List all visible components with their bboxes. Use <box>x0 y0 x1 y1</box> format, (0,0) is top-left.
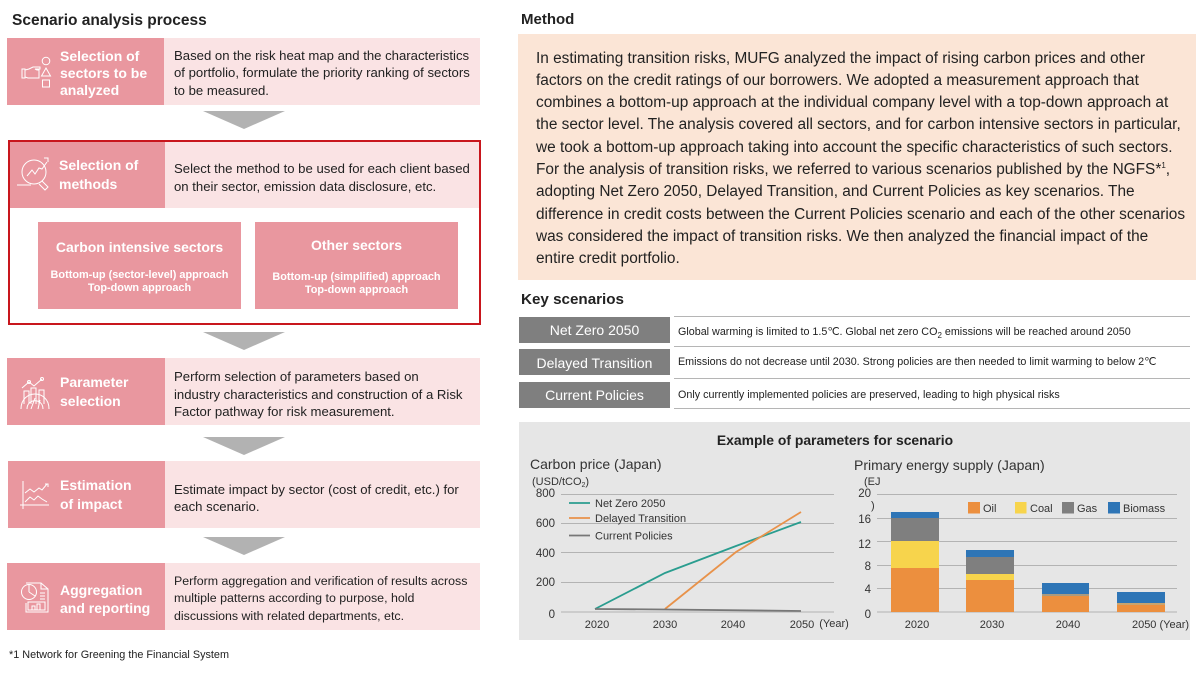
carbon intensive title: Carbon intensive sectors <box>56 239 223 255</box>
step 5 text: Perform aggregation and verification of results across <box>174 574 467 588</box>
method paragraph: the sector level. The analysis covered all sectors, and for carbon intensive sectors in particular, <box>536 116 1181 133</box>
unit: (EJ <box>864 476 880 488</box>
icon: city chart and globe <box>20 377 50 410</box>
step 3 title block <box>7 358 165 425</box>
step 4 text: each scenario. <box>174 499 259 514</box>
x axis labels: 2050 (Year) <box>1132 619 1189 631</box>
carbon intensive approaches <box>51 268 228 294</box>
y axis labels: 200 <box>536 577 555 589</box>
legend: Coal <box>1030 503 1053 515</box>
unit wrap: ) <box>871 500 875 512</box>
step 3 title: Parameter <box>60 374 128 390</box>
step 4: estimation of impact <box>8 461 480 528</box>
box: carbon intensive sectors <box>38 222 241 309</box>
x axis labels: 2050 <box>790 619 814 631</box>
legend: Oil <box>983 503 996 515</box>
step 1 title: sectors to be <box>60 64 147 80</box>
bars 2020 <box>891 512 939 612</box>
method paragraph: we took a bottom-up approach taking into account the specific characteristics of such sectors. <box>536 139 1172 156</box>
step 3 text: industry characteristics and construction of a Risk <box>174 386 462 402</box>
other sectors approaches: Top-down approach <box>305 284 408 296</box>
heading: scenario analysis process: Scenario analysis process <box>12 12 207 29</box>
step 1 description <box>164 38 480 105</box>
step 3: parameter selection <box>7 358 480 425</box>
heading: key scenarios: Key scenarios <box>521 291 624 308</box>
method paragraph: entire credit portfolio. <box>536 250 680 267</box>
scenario: delayed transition label <box>519 349 670 375</box>
step 2 text <box>174 161 470 194</box>
step 4 description <box>165 461 480 528</box>
grid lines <box>877 494 1177 588</box>
bars 2050 <box>1117 592 1165 612</box>
step 1 text <box>174 48 470 98</box>
step 4 text: Estimate impact by sector (cost of credit, etc.) for <box>174 482 459 496</box>
step 4 title: Estimation <box>60 477 132 493</box>
other sectors approaches: Bottom-up (simplified) approach <box>272 270 441 282</box>
legend: Current Policies <box>595 530 673 542</box>
step 1 text: of portfolio, formulate the priority ranking of sectors <box>174 65 470 80</box>
legend: Biomass <box>1123 503 1166 515</box>
step 5 text <box>174 574 467 622</box>
step 4 title: of impact <box>60 496 122 512</box>
method paragraph <box>536 50 1185 267</box>
x axis labels <box>585 618 849 631</box>
step 5 title <box>60 582 150 616</box>
method paragraph: combines a bottom-up approach at the individual company level with a top-down approach at <box>536 94 1168 111</box>
step 1 title <box>60 48 147 98</box>
step 3 title <box>60 374 128 409</box>
y axis labels: 0 <box>549 609 555 621</box>
scenario: current policies description: Only currently implemented policies are preserved, leading to high physical risks <box>678 389 1060 401</box>
step 1 title: Selection of <box>60 48 139 64</box>
step 5 text: discussions with related departments, etc. <box>174 608 404 622</box>
step 1 text: to be measured. <box>174 82 269 98</box>
arrow 3 <box>203 437 285 455</box>
y axis labels: 0 <box>865 609 871 621</box>
scenario: current policies label: Current Policies <box>545 387 644 403</box>
scenario: delayed transition description: Emissions do not decrease until 2030. Strong policies are then needed to limit warming to below 2℃ <box>678 356 1156 368</box>
step 4 title <box>60 477 132 512</box>
step 5 description <box>165 563 480 630</box>
icon: hand with shapes <box>22 56 52 88</box>
scenario: net zero 2050 label <box>519 317 670 343</box>
step 3 text <box>174 369 462 419</box>
heading: method: Method <box>521 11 574 28</box>
bars 2040 <box>1042 583 1089 612</box>
y axis labels: 12 <box>858 539 871 551</box>
method paragraph: factors on the credit ratings of our borrowers. We adopted a measurement approach that <box>536 72 1139 89</box>
carbon intensive approaches: Top-down approach <box>88 282 191 294</box>
y axis labels: 400 <box>536 548 555 560</box>
arrow 2 <box>203 332 285 350</box>
legend <box>569 498 686 542</box>
unit: 2 <box>582 482 586 489</box>
step 3 description <box>165 358 480 425</box>
other sectors title: Other sectors <box>311 237 402 253</box>
y axis labels: 800 <box>536 488 555 500</box>
carbon intensive approaches: Bottom-up (sector-level) approach <box>51 268 228 280</box>
y axis labels <box>536 488 555 621</box>
step 5 title: and reporting <box>60 600 150 616</box>
legend: Net Zero 2050 <box>595 498 665 510</box>
y axis labels: 600 <box>536 518 555 530</box>
step 2 text: Select the method to be used for each client based <box>174 161 470 176</box>
legend <box>968 502 1166 515</box>
legend: Delayed Transition <box>595 513 686 525</box>
scenario: net zero 2050 label: Net Zero 2050 <box>550 322 639 338</box>
legend: Gas <box>1077 503 1098 515</box>
series lines <box>595 512 801 611</box>
step 3 text: Perform selection of parameters based on <box>174 369 419 384</box>
x axis labels: 2020 <box>585 619 609 631</box>
step 4 title block <box>8 461 165 528</box>
step 5 text: multiple patterns according to purpose, hold <box>174 591 414 605</box>
bars 2030 <box>966 550 1014 612</box>
y axis labels <box>858 488 872 621</box>
method paragraph: was considered the impact of transition risks. We then analyzed the financial impact of the <box>536 228 1148 245</box>
x axis labels: 2040 <box>721 619 745 631</box>
unit: (USD/tCO <box>532 476 582 488</box>
step 2 title: methods <box>59 176 117 192</box>
other sectors approaches <box>272 270 441 296</box>
panel title: Example of parameters for scenario <box>717 432 953 448</box>
x axis labels: 2040 <box>1056 619 1080 631</box>
footnote: *1 Network for Greening the Financial System <box>9 649 229 661</box>
x axis labels: 2020 <box>905 619 929 631</box>
step 5 title block <box>7 563 165 630</box>
icon: line graph <box>20 481 49 509</box>
chart title: Primary energy supply (Japan) <box>854 457 1045 473</box>
y axis labels: 20 <box>858 488 871 500</box>
scenario: current policies label <box>519 382 670 408</box>
y axis labels: 8 <box>865 561 871 573</box>
step 3 title: selection <box>60 393 121 409</box>
step 2 title: Selection of <box>59 157 138 173</box>
method paragraph: difference in credit costs between the Current Policies scenario and each of the other scenarios <box>536 206 1185 223</box>
scenario table <box>519 316 1190 409</box>
unit: ) <box>585 476 589 488</box>
icon: report document <box>21 582 48 612</box>
step 2 title <box>59 157 138 192</box>
step 1 title: analyzed <box>60 82 119 98</box>
chart title: Carbon price (Japan) <box>530 456 662 472</box>
y axis labels: 4 <box>865 584 872 596</box>
step 4 text <box>174 482 459 514</box>
scenario: net zero 2050 description: Global warming is limited to 1.5℃. Global net zero CO2 emissions will be reached around 2050 <box>678 326 1131 340</box>
x axis labels: 2030 <box>980 619 1004 631</box>
step 5: aggregation and reporting <box>7 563 480 630</box>
step 1 text: Based on the risk heat map and the characteristics <box>174 48 469 62</box>
step 1: selection of sectors <box>7 38 480 105</box>
icon: magnifier with chart <box>17 158 48 191</box>
arrow 4 <box>203 537 285 555</box>
x axis labels: (Year) <box>819 618 849 630</box>
step 2: selection of methods <box>8 140 481 325</box>
method paragraph: adopting Net Zero 2050, Delayed Transition, and Current Policies as key scenarios. The <box>536 183 1135 200</box>
panel: example of parameters <box>519 422 1190 640</box>
x axis labels <box>905 619 1189 631</box>
method paragraph: For the analysis of transition risks, we referred to various scenarios published by the NGFS*1, <box>536 161 1170 178</box>
panel: method text <box>518 34 1196 280</box>
scenario: delayed transition label: Delayed Transition <box>537 355 652 371</box>
y axis labels: 16 <box>858 514 871 526</box>
step 2 title block <box>10 142 165 208</box>
arrow 1 <box>203 111 285 129</box>
step 5 title: Aggregation <box>60 582 142 598</box>
step 1 title block <box>7 38 164 105</box>
grid lines <box>561 494 834 582</box>
step 3 text: Factor pathway for risk measurement. <box>174 404 395 419</box>
method paragraph: In estimating transition risks, MUFG analyzed the impact of rising carbon prices and other <box>536 50 1145 66</box>
box: other sectors <box>255 222 458 309</box>
step 2 text: on their sector, emission data disclosure, etc. <box>174 178 436 194</box>
step 2 description <box>165 142 479 208</box>
x axis labels: 2030 <box>653 619 677 631</box>
